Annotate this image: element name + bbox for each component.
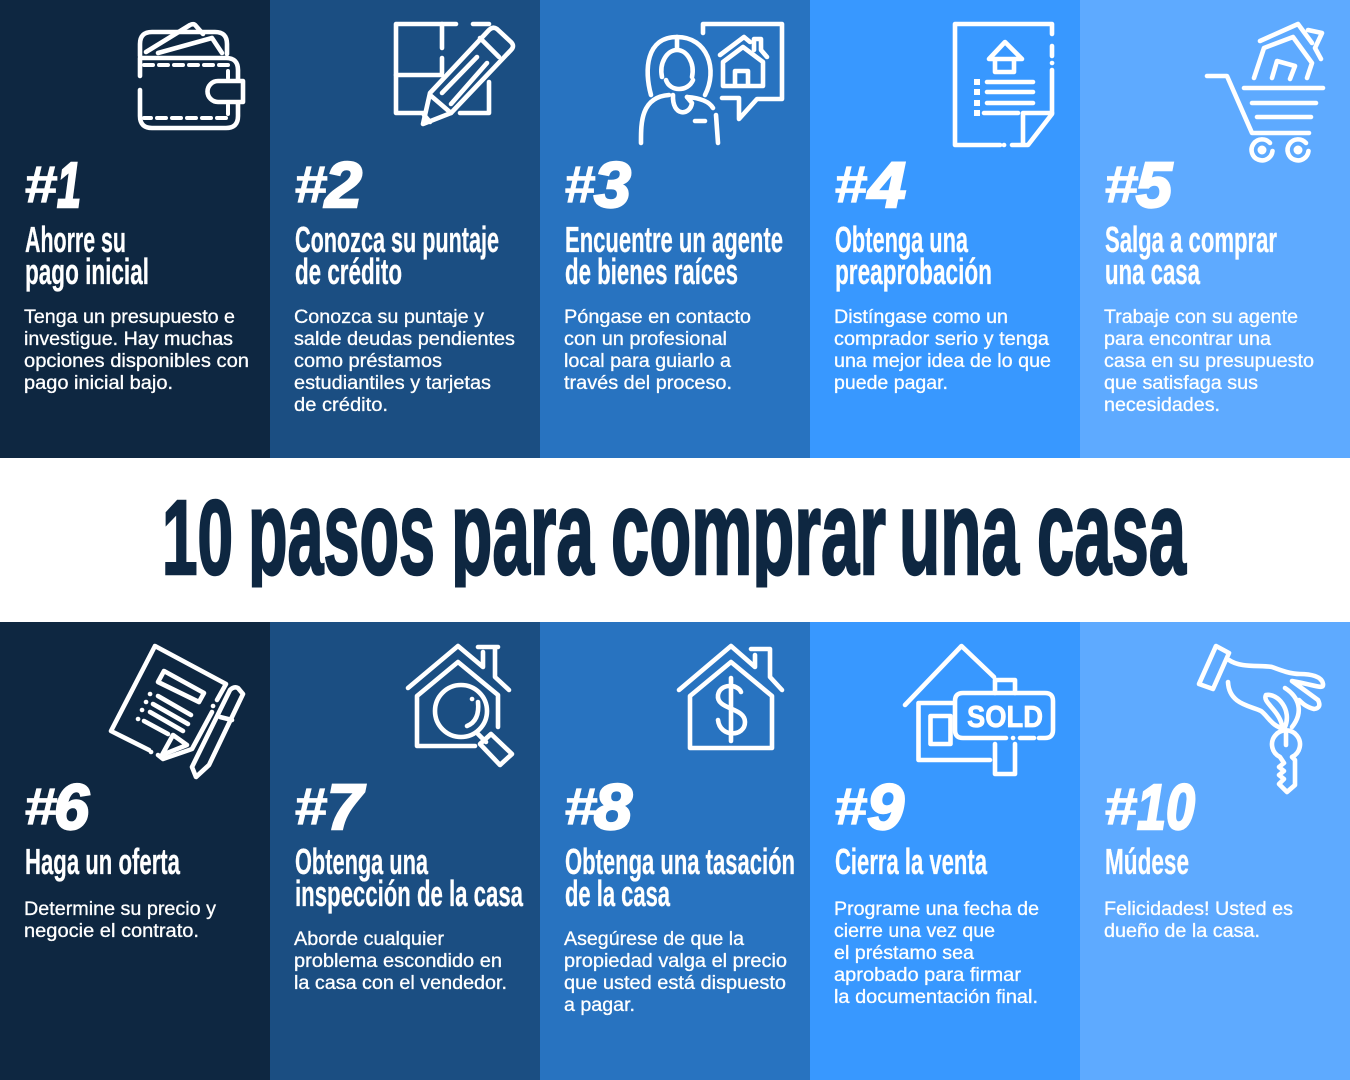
body text: como préstamos (294, 351, 442, 372)
step number: # (834, 778, 867, 836)
step number (1104, 149, 1173, 221)
panel: step 4 (810, 0, 1080, 458)
step number (834, 149, 906, 221)
icon: hand holding key (1199, 646, 1323, 792)
heading (295, 841, 523, 914)
icon: house inspection magnifier (408, 646, 512, 765)
title: casa (1037, 466, 1187, 600)
body text: través del proceso. (564, 373, 732, 394)
icon: wallet (140, 24, 243, 128)
heading: preaprobación (835, 251, 992, 292)
step number (564, 149, 631, 221)
heading (565, 219, 783, 292)
title band (165, 498, 1188, 588)
body text: estudiantiles y tarjetas (294, 373, 491, 394)
body text: comprador serio y tenga (834, 329, 1049, 350)
body text: Aborde cualquier (294, 929, 445, 950)
body text (834, 899, 1039, 1008)
step number: 9 (867, 771, 904, 843)
step number: 5 (1136, 149, 1173, 221)
body text: a pagar. (564, 995, 635, 1016)
step number (24, 771, 89, 843)
body text: para encontrar una (1104, 329, 1271, 350)
heading: inspección de la casa (295, 873, 523, 914)
body text (294, 307, 515, 416)
icon: document with house (955, 24, 1052, 145)
step number: # (1104, 156, 1138, 214)
heading (835, 219, 992, 292)
heading: Conozca su puntaje (295, 219, 499, 260)
heading: Obtenga una (835, 219, 968, 260)
body text: la documentación final. (834, 987, 1038, 1008)
body text (24, 307, 249, 394)
body text: salde deudas pendientes (294, 329, 515, 350)
heading (295, 219, 499, 292)
step number: 7 (327, 771, 366, 843)
body text: Distíngase como un (834, 307, 1008, 328)
panel: step 5 (1080, 0, 1350, 458)
body text: Programe una fecha de (834, 899, 1039, 920)
body text: problema escondido en (294, 951, 502, 972)
body text (294, 929, 507, 994)
body text: negocie el contrato. (24, 921, 199, 942)
body text (834, 307, 1051, 394)
body text (24, 899, 217, 942)
body text: con un profesional (564, 329, 727, 350)
icon: blueprint and pencil (396, 24, 513, 124)
body text (564, 307, 751, 394)
title: comprar (611, 466, 886, 600)
heading: Múdese (1105, 841, 1189, 882)
heading: Obtenga una tasación (565, 841, 795, 882)
body text: casa en su presupuesto (1104, 351, 1314, 372)
step number: 10 (1137, 771, 1195, 843)
icon: real estate agent (641, 24, 782, 143)
panel: step 6 (0, 622, 270, 1080)
body text (1104, 307, 1314, 416)
title: 10 (162, 479, 233, 597)
step number: 8 (594, 771, 632, 843)
step number (1104, 771, 1195, 843)
title: para (451, 466, 595, 600)
step number (294, 771, 366, 843)
panel: step 10 (1080, 622, 1350, 1080)
panel: step 7 (270, 622, 540, 1080)
heading: Ahorre su (25, 219, 126, 260)
icon: shopping cart with house (1207, 24, 1323, 160)
body text: Asegúrese de que la (564, 929, 744, 950)
body text: aprobado para firmar (834, 965, 1022, 986)
body text: Conozca su puntaje y (294, 307, 485, 328)
step number: # (24, 778, 57, 836)
body text: de crédito. (294, 395, 388, 416)
body text: Determine su precio y (24, 899, 217, 920)
step number: 6 (54, 771, 89, 843)
heading: de crédito (295, 251, 402, 292)
heading: Cierra la venta (835, 841, 987, 882)
step number: # (294, 778, 327, 836)
heading: de bienes raíces (565, 251, 738, 292)
step number (294, 149, 362, 221)
step number: # (24, 156, 57, 214)
panel: step 8 (540, 622, 810, 1080)
body text: puede pagar. (834, 373, 948, 394)
body text: Tenga un presupuesto e (24, 307, 235, 328)
step number (834, 771, 904, 843)
heading (25, 219, 149, 292)
icon: contract and pen (111, 646, 243, 777)
panel: step 3 (540, 0, 810, 458)
step number: # (834, 156, 867, 214)
heading (565, 841, 795, 914)
panel: step 9 (810, 622, 1080, 1080)
heading: de la casa (565, 873, 670, 914)
body text: pago inicial bajo. (24, 373, 173, 394)
icon: sold house sign: SOLD (967, 699, 1043, 734)
body text: que usted está dispuesto (564, 973, 786, 994)
title: pasos (248, 466, 435, 600)
step number: # (564, 156, 595, 214)
heading: una casa (1105, 251, 1200, 292)
step number: # (1104, 778, 1137, 836)
heading: pago inicial (25, 251, 149, 292)
step number (564, 771, 632, 843)
body text: local para guiarlo a (564, 351, 731, 372)
panel: step 2 (270, 0, 540, 458)
body text: el préstamo sea (834, 943, 974, 964)
step number: # (564, 778, 597, 836)
body text: Trabaje con su agente (1104, 307, 1298, 328)
icon: sold house sign (905, 646, 1053, 774)
panel: step 1 (0, 0, 270, 458)
body text: Felicidades! Usted es (1104, 899, 1293, 920)
body text: necesidades. (1104, 395, 1220, 416)
body text: investigue. Hay muchas (24, 329, 233, 350)
body text: opciones disponibles con (24, 351, 249, 372)
step number: 1 (57, 149, 81, 221)
title (165, 498, 1188, 588)
heading (1105, 219, 1277, 292)
heading: Encuentre un agente (565, 219, 783, 260)
body text: una mejor idea de lo que (834, 351, 1051, 372)
body text: cierre una vez que (834, 921, 995, 942)
icon: house with dollar sign (679, 646, 782, 748)
title: una (899, 466, 1020, 600)
heading: Haga un oferta (25, 841, 180, 882)
step number: 3 (594, 149, 631, 221)
body text: propiedad valga el precio (564, 951, 787, 972)
step number: 4 (866, 149, 906, 221)
body text: Póngase en contacto (564, 307, 751, 328)
heading: Obtenga una (295, 841, 428, 882)
step number: 2 (324, 149, 362, 221)
body text (1104, 899, 1293, 942)
body text (564, 929, 787, 1016)
step number (24, 149, 81, 221)
body text: que satisfaga sus (1104, 373, 1258, 394)
body text: dueño de la casa. (1104, 921, 1260, 942)
body text: la casa con el vendedor. (294, 973, 507, 994)
step number: # (294, 156, 327, 214)
